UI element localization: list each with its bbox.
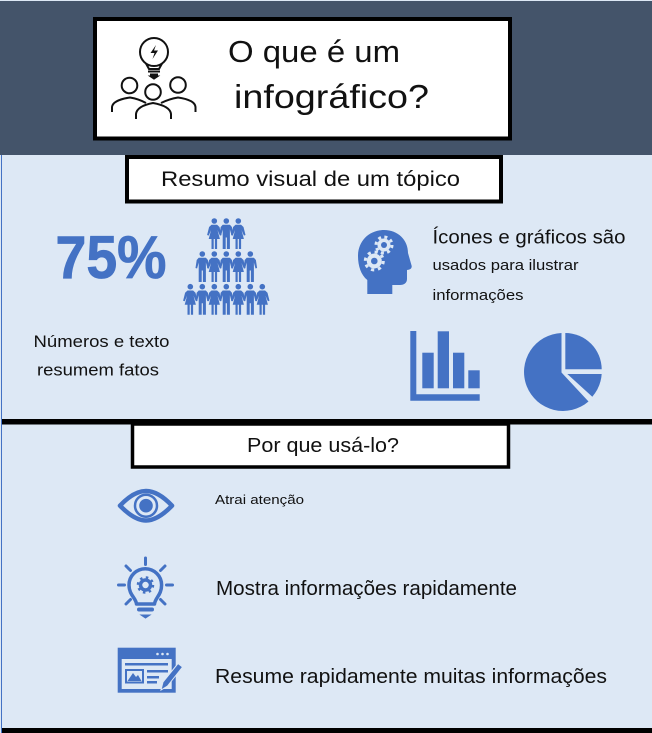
icon: lightbulb with gear — [118, 558, 172, 618]
icon: pie chart — [524, 333, 602, 411]
text: icons and charts — [432, 228, 626, 304]
stat: 75%: 75% — [56, 224, 166, 291]
text: numbers summarize facts — [34, 332, 170, 380]
heading: why use it: Por que usá-lo? — [247, 435, 399, 457]
heading: visual summary: Resumo visual de um tópico — [161, 168, 460, 191]
panel: visual summary — [34, 157, 626, 411]
text: icons and charts: informações — [432, 287, 524, 304]
header band — [0, 1, 652, 155]
text: attracts attention: Atrai atenção — [215, 492, 304, 507]
text: icons and charts: Ícones e gráficos são — [432, 228, 626, 248]
title box — [95, 19, 510, 138]
icon: eye — [120, 491, 172, 520]
heading: visual summary — [127, 157, 501, 202]
divider bar — [2, 419, 652, 424]
bottom bar — [2, 728, 652, 733]
icon: head with gears — [358, 230, 412, 294]
title text: O que é um — [228, 34, 400, 69]
left edge line — [1, 155, 2, 733]
text: numbers summarize facts: Números e texto — [34, 332, 170, 351]
text: numbers summarize facts: resumem fatos — [37, 360, 159, 380]
icon: bar chart — [410, 331, 480, 401]
icon: group of people — [183, 218, 270, 315]
panel: why use it — [118, 424, 607, 693]
text: icons and charts: usados para ilustrar — [432, 257, 579, 274]
title text — [228, 34, 429, 115]
heading: why use it — [132, 424, 508, 467]
title text: infográfico? — [234, 78, 429, 115]
text: summarizes a lot of information: Resume rapidamente muitas informações — [215, 666, 607, 688]
icon: web page with pencil — [118, 648, 182, 693]
icon: people with lightbulb — [112, 38, 196, 119]
text: shows information quickly: Mostra informações rapidamente — [216, 578, 517, 600]
